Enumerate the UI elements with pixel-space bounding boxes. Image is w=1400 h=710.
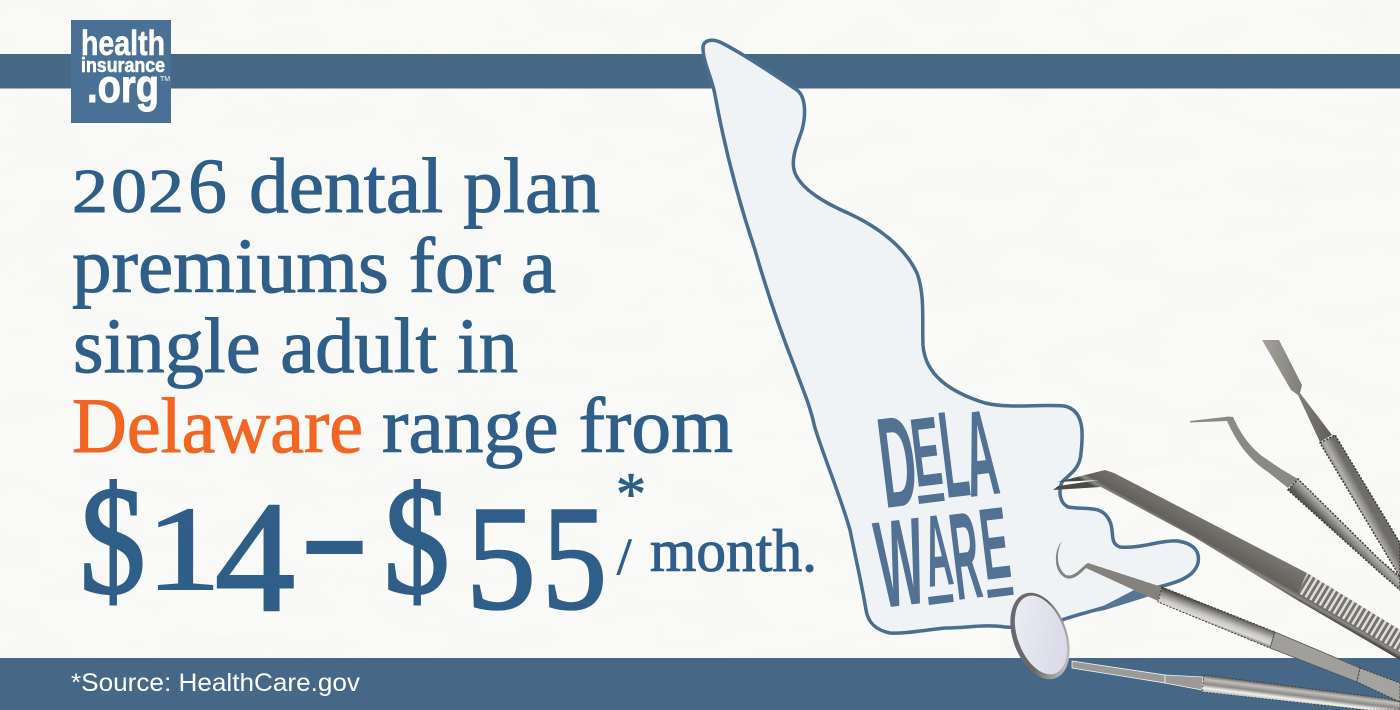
per month label: month. (650, 518, 817, 584)
top band (0, 54, 1400, 88)
price range: – (307, 415, 362, 638)
logo: healthinsurance.org: TM (160, 76, 170, 83)
heading: range from (382, 382, 733, 469)
price range: * (616, 461, 646, 527)
Delaware lettering: A (918, 494, 958, 610)
icon: hooked probe instrument (1056, 541, 1400, 702)
icon: tweezers (1053, 470, 1400, 660)
Delaware lettering: A (957, 385, 1005, 523)
heading: 2 (148, 157, 184, 226)
price range: $ (384, 456, 450, 627)
icon: spatula instrument (1262, 340, 1400, 577)
price range: $ (80, 456, 146, 627)
heading: dental plan (249, 142, 600, 229)
logo: healthinsurance.org: insurance (81, 55, 165, 77)
Delaware lettering: R (943, 487, 988, 627)
heading: 2 (72, 157, 108, 226)
logo: healthinsurance.org: .org (87, 60, 159, 112)
heading: 0 (111, 157, 147, 226)
heading: single adult in (73, 302, 518, 389)
icon: dental mirror (999, 584, 1400, 710)
logo: healthinsurance.org: health (81, 24, 165, 63)
heading: Delaware (72, 382, 363, 469)
Delaware lettering (868, 383, 1016, 635)
Delaware lettering: W (868, 492, 933, 635)
Delaware map outline (703, 40, 1198, 633)
price range: 5 (542, 476, 607, 641)
Delaware lettering: E (974, 484, 1016, 602)
price range: 1 (146, 483, 221, 616)
Delaware lettering: E (905, 396, 947, 509)
Delaware lettering: L (932, 383, 975, 525)
source note: *Source: HealthCare.gov (71, 669, 361, 697)
price range: 5 (466, 476, 536, 641)
map shadow under probe (1090, 587, 1160, 613)
heading (72, 142, 733, 469)
heading: premiums for a (72, 222, 556, 309)
logo: healthinsurance.org (71, 20, 171, 123)
price range (80, 415, 646, 645)
heading: 6 (188, 142, 227, 229)
per month label: / (617, 529, 632, 586)
icon: curved probe instrument (1190, 416, 1400, 590)
Delaware lettering: D (871, 387, 924, 535)
price range: 4 (215, 470, 295, 645)
bottom band (0, 658, 1400, 710)
